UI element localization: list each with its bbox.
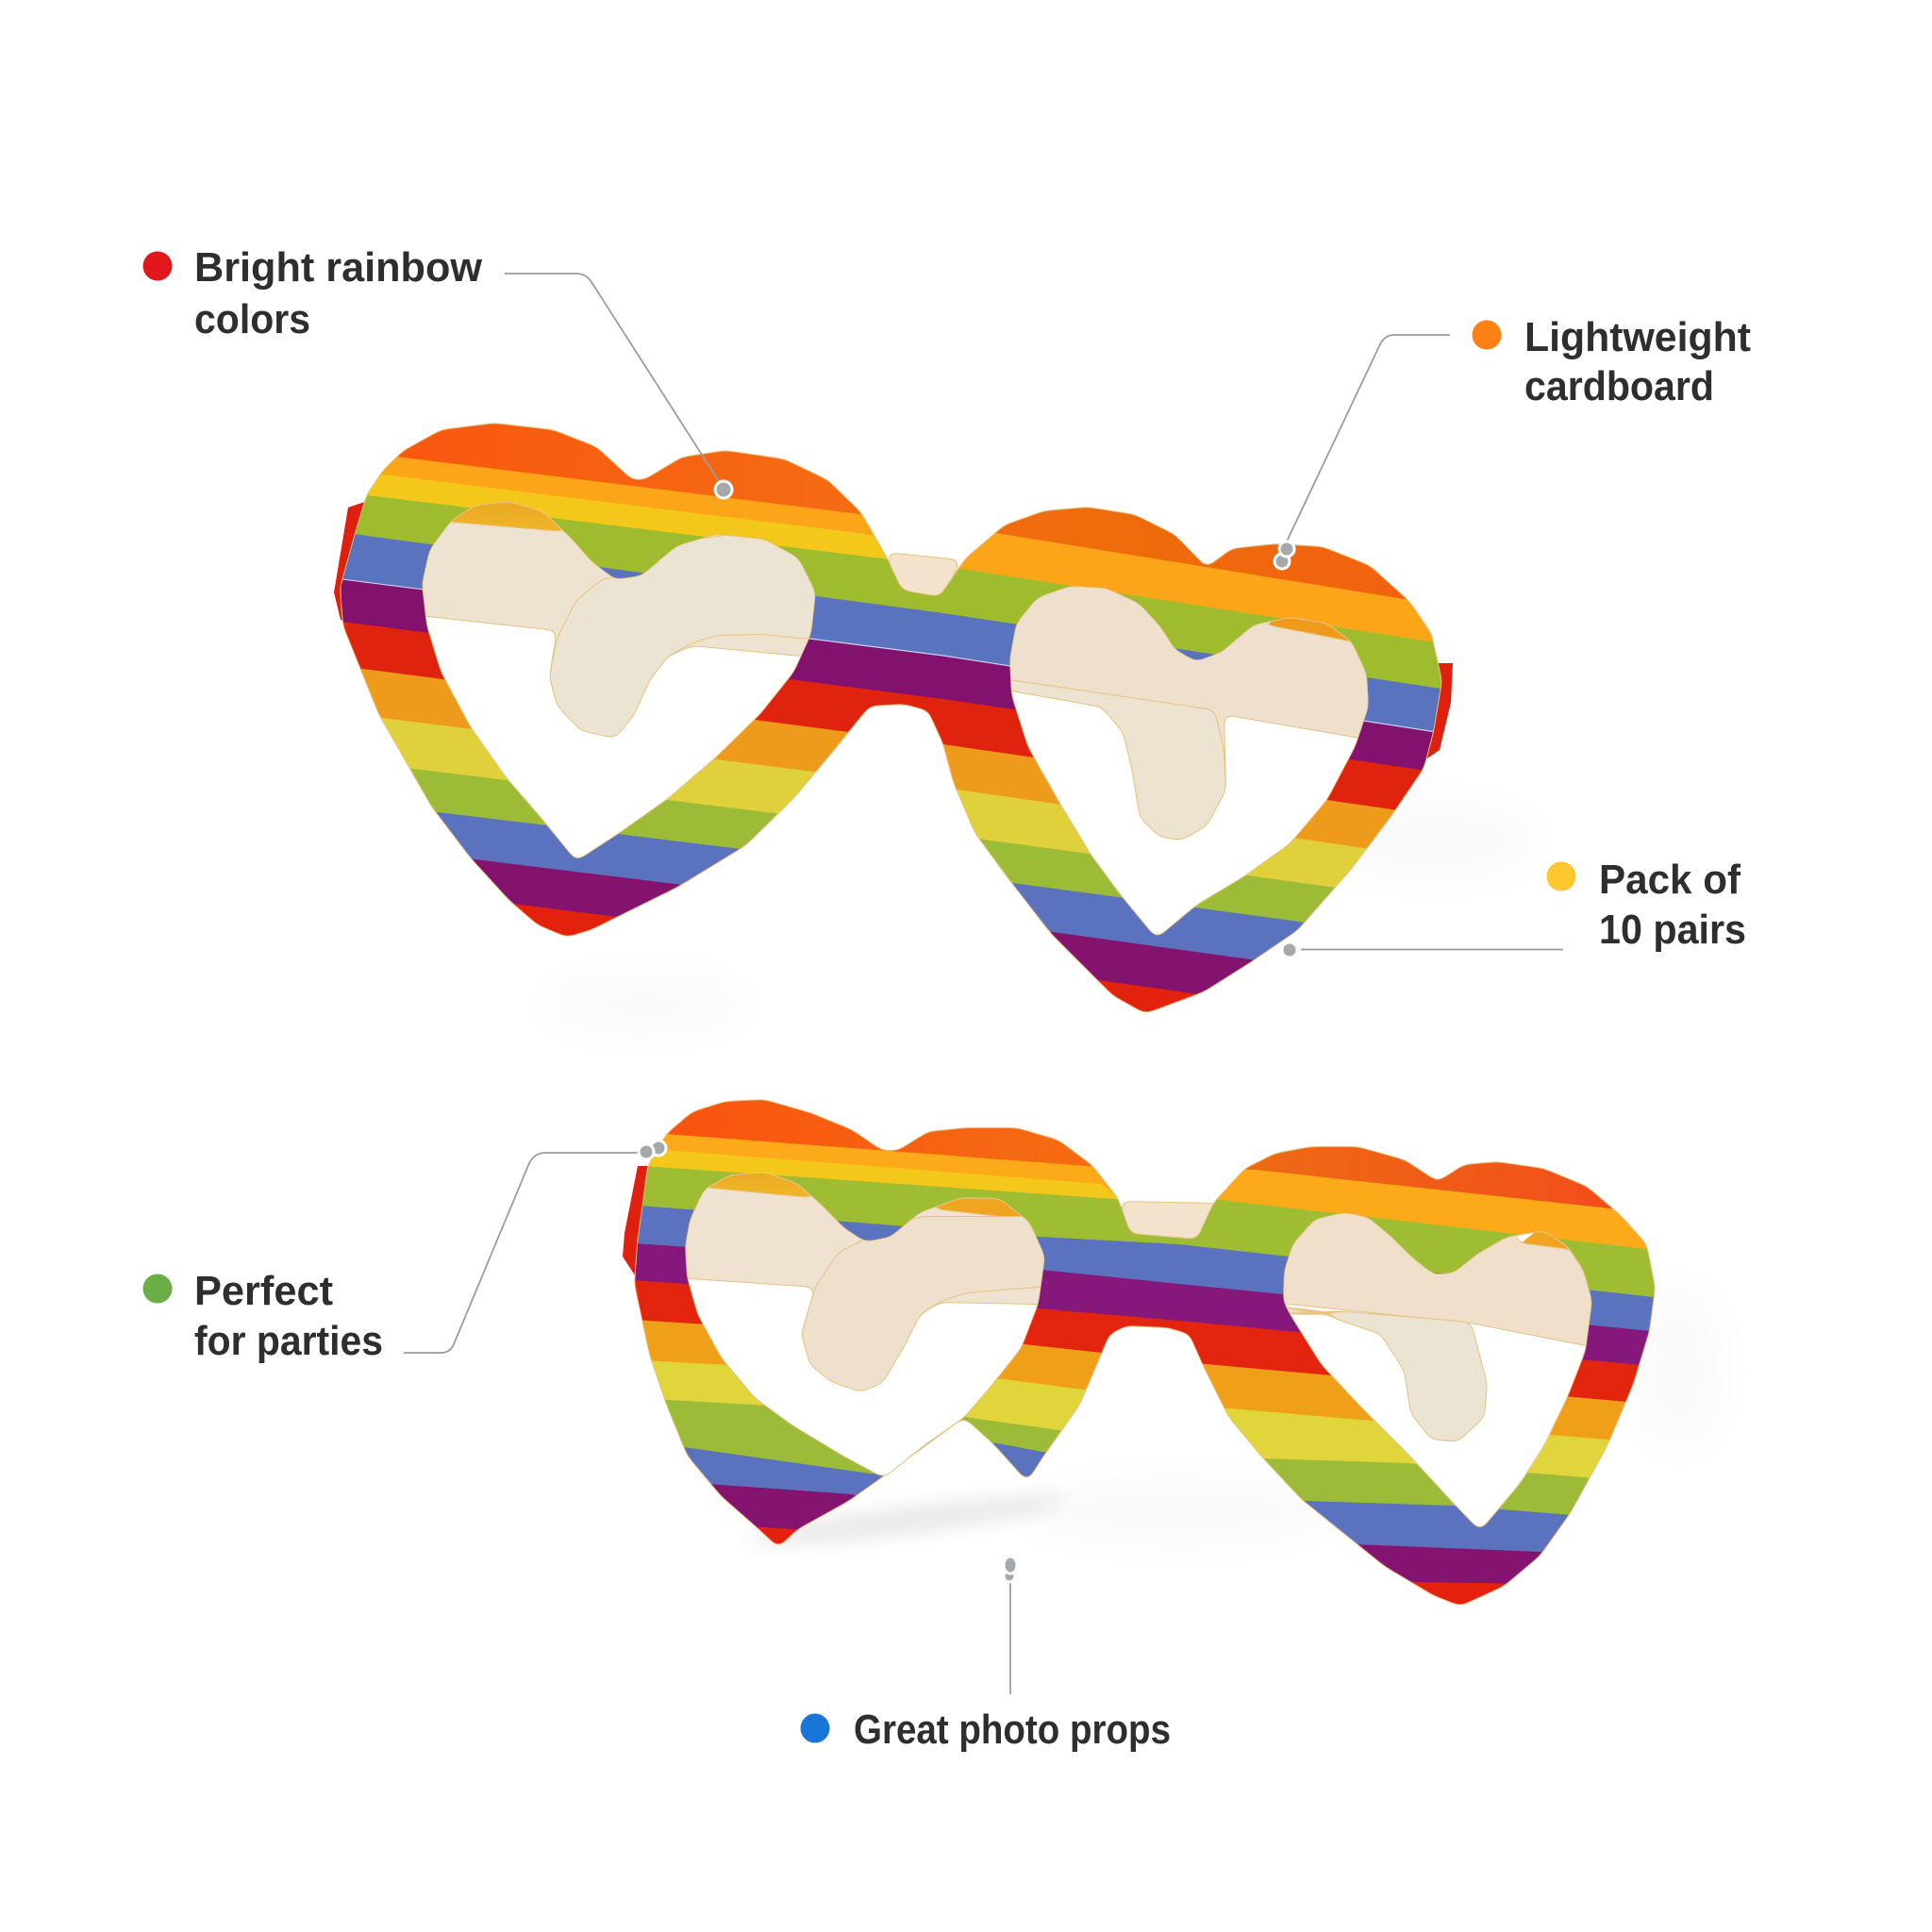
marker [1274, 541, 1294, 569]
glasses: top pair [334, 423, 1453, 1013]
soft shadows under the glasses [541, 802, 1726, 1554]
frame edge [635, 1100, 1655, 1606]
label: Pack of 10 pairs: 10 pairs [1599, 907, 1746, 953]
marker [1004, 1557, 1017, 1582]
callout: Bright rainbow colors [143, 244, 732, 498]
label: Bright rainbow colors: colors [194, 296, 310, 342]
label: Perfect for parties: for parties [194, 1318, 383, 1364]
right eye: back band and fold [1284, 1213, 1591, 1441]
bridge back band [887, 553, 960, 599]
label: Lightweight cardboard: cardboard [1524, 363, 1714, 409]
side tab: red [623, 1166, 656, 1275]
callout: Great photo props [800, 1557, 1171, 1753]
bridge back band [1121, 1202, 1221, 1241]
rainbow frame [635, 1100, 1655, 1604]
frame edge [341, 424, 1441, 1013]
left eye opening [686, 1173, 1044, 1477]
label: Lightweight cardboard: Lightweight [1524, 314, 1751, 360]
label: Pack of 10 pairs: Pack of [1599, 857, 1740, 903]
marker [1282, 942, 1297, 958]
dot: blue [800, 1713, 830, 1743]
label: Bright rainbow colors: Bright rainbow [194, 244, 483, 291]
marker [639, 1141, 666, 1159]
rainbow frame [341, 424, 1441, 1011]
side tab: right red [1424, 663, 1453, 760]
dot: orange [1472, 321, 1502, 349]
leader line [505, 274, 724, 489]
label: Perfect for parties: Perfect [194, 1268, 333, 1314]
dot: yellow [1547, 862, 1575, 891]
leader line [1301, 949, 1563, 951]
dot: red [143, 251, 172, 281]
left eye opening [423, 502, 815, 860]
marker [715, 481, 732, 498]
callout: Lightweight cardboard [1274, 314, 1751, 569]
glasses: bottom pair [604, 1075, 1679, 1641]
side tab: left red [334, 500, 370, 623]
right eye opening [1284, 1213, 1591, 1530]
callout: Pack of 10 pairs [1282, 857, 1746, 958]
callout: Perfect for parties [143, 1141, 666, 1364]
leader line [1009, 1583, 1011, 1694]
leader line [1287, 335, 1450, 541]
label: Great photo props: Great photo props [854, 1707, 1171, 1753]
dot: green [143, 1274, 172, 1304]
right eye: back band and fold [1010, 587, 1368, 840]
leader line [404, 1153, 641, 1353]
right eye opening [1010, 587, 1368, 938]
left eye: back band and fold [686, 1174, 1043, 1391]
left eye: back band and fold [423, 502, 815, 738]
